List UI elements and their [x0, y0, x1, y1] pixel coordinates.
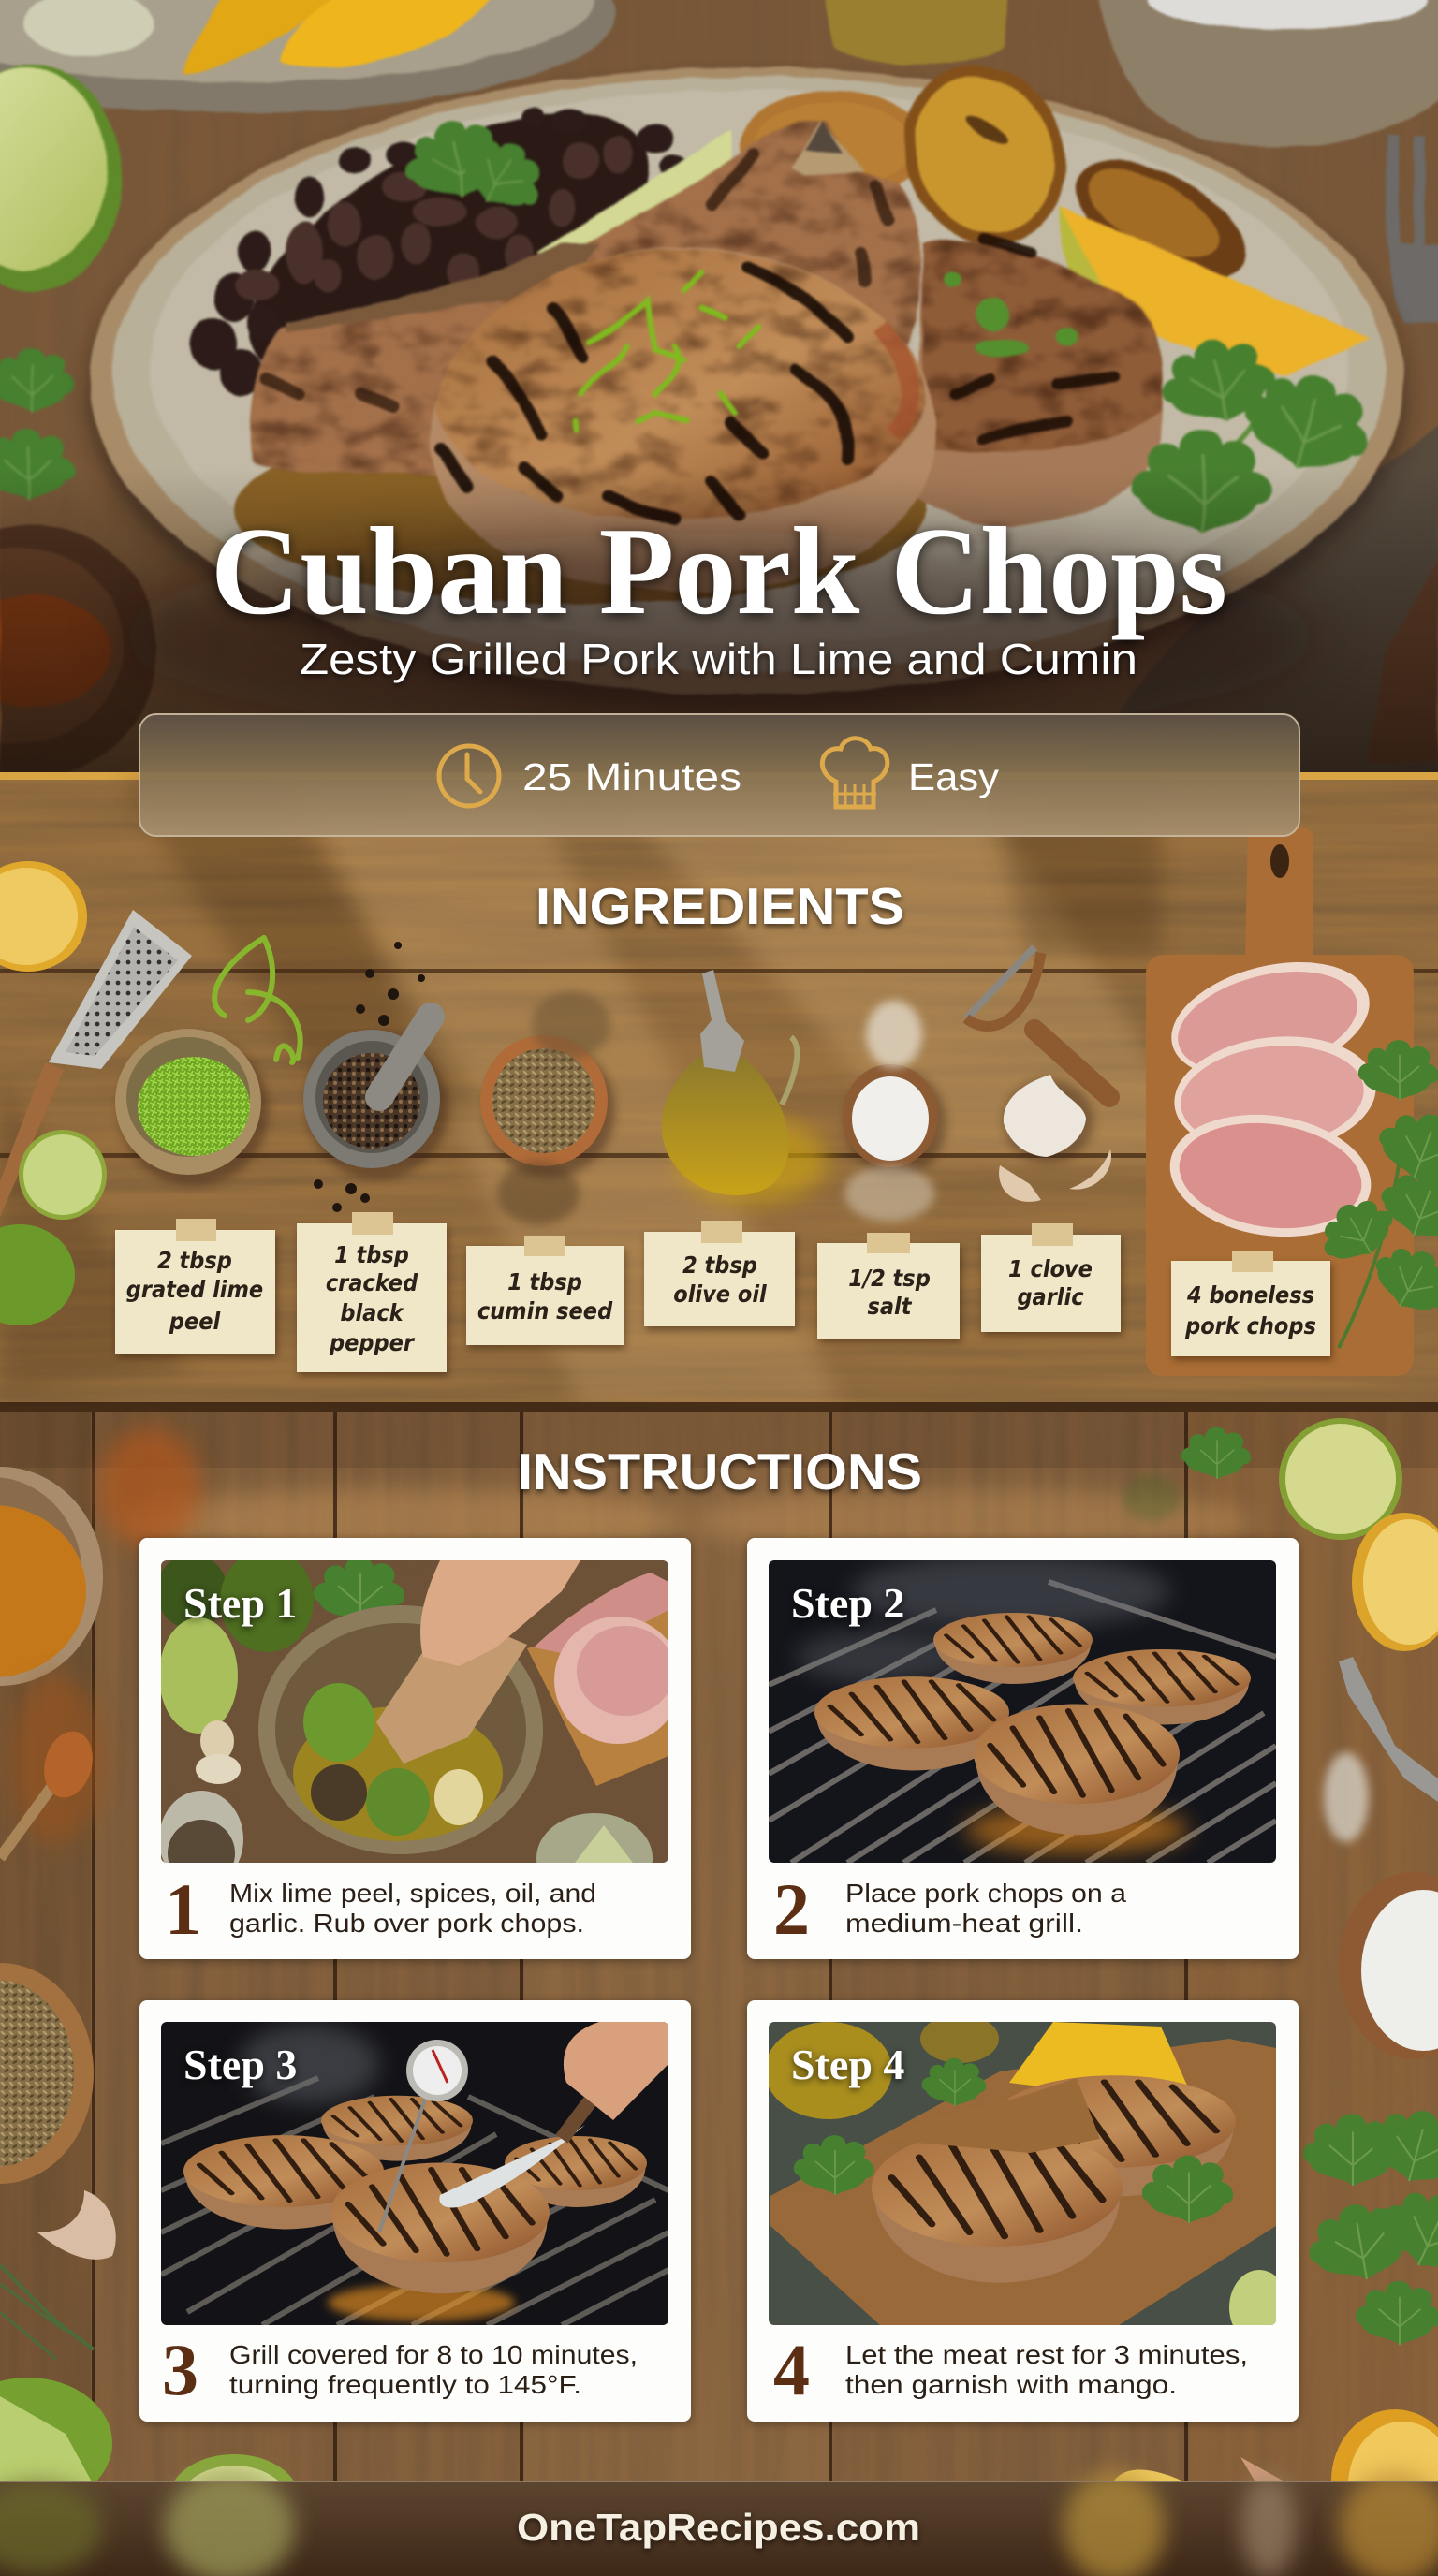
ingredient note: cumin: 1 tbsp	[507, 1268, 582, 1295]
side plate with mango	[0, 0, 616, 112]
pork chop with bone	[251, 120, 920, 524]
sauce pool	[234, 417, 927, 604]
section: ingredients wood background	[0, 780, 1438, 1413]
right pork chop	[889, 239, 1163, 526]
step 4 text	[845, 2340, 1248, 2399]
difficulty label: Easy	[908, 755, 1000, 798]
ingredient note: salt: 1/2 tsp	[848, 1265, 931, 1292]
cilantro sprigs	[0, 348, 75, 501]
parsley	[1310, 1040, 1438, 1348]
black beans	[189, 58, 690, 438]
oil glass	[822, 0, 1009, 65]
footer band	[0, 2471, 1438, 2576]
ingredient note: pork chops	[1171, 1251, 1330, 1356]
ingredient note: lime peel: grated lime	[126, 1276, 263, 1303]
cutting board with pork	[1146, 826, 1414, 1376]
cilantro on plate	[1131, 329, 1383, 534]
spice bowl	[0, 524, 157, 777]
ingredient note: olive oil	[644, 1221, 795, 1326]
step 4 text: Let the meat rest for 3 minutes,	[845, 2340, 1248, 2369]
ingredient note: black pepper: black	[340, 1299, 405, 1326]
mortar of cracked pepper	[303, 1017, 448, 1179]
main pork chop	[429, 247, 936, 592]
section: instructions wood background	[0, 1412, 1438, 2488]
lemon slice	[0, 861, 87, 972]
bowl top right	[1097, 0, 1438, 148]
mango wedge	[1060, 206, 1371, 376]
ingredient note: lime peel: peel	[169, 1308, 220, 1335]
garlic bulb and cloves	[999, 1075, 1111, 1202]
ingredient note: garlic: 1 clove	[1008, 1255, 1093, 1282]
bowl of grated lime peel	[115, 1029, 269, 1186]
step 2 number: 2	[773, 1868, 810, 1950]
card: step 2	[747, 1538, 1299, 1961]
ingredient note: cumin: cumin seed	[477, 1297, 613, 1325]
step 4 text: then garnish with mango.	[845, 2370, 1177, 2399]
lime zest garnish	[576, 271, 758, 431]
step 4 photo: resting with mango	[765, 2014, 1289, 2345]
lime wedge	[537, 129, 732, 267]
olive oil bottle	[662, 970, 829, 1203]
decor: right citrus, fork, salt, herbs	[1114, 1418, 1438, 2552]
step 1 photo: rubbing pork chops	[156, 1549, 682, 1903]
step 2 text	[845, 1879, 1126, 1938]
whole lime	[0, 1224, 75, 1325]
ingredient note: cumin	[466, 1236, 624, 1345]
step 3 text: turning frequently to 145°F.	[229, 2370, 581, 2399]
ingredient note: pork chops: 4 boneless	[1186, 1281, 1314, 1309]
step 4 label: Step 4	[791, 2041, 904, 2088]
ingredient note: garlic	[981, 1223, 1121, 1332]
grater	[0, 910, 192, 1217]
title: Cuban Pork Chops	[211, 502, 1227, 640]
step 2 photo: chops on grill	[769, 1554, 1276, 1863]
cilantro on beans	[399, 113, 555, 222]
ingredient note: black pepper	[297, 1212, 447, 1372]
step 4 number: 4	[773, 2329, 810, 2410]
step 2 text: Place pork chops on a	[845, 1879, 1126, 1908]
step 1 text	[229, 1879, 596, 1938]
ingredient note: salt: salt	[867, 1293, 913, 1320]
pork chop 1	[1159, 944, 1382, 1097]
hero photo: plated pork chops	[0, 0, 1438, 796]
ingredient note: black pepper: cracked	[326, 1269, 418, 1296]
ingredient note: black pepper: 1 tbsp	[334, 1241, 409, 1268]
gold divider	[0, 772, 1438, 780]
lime half	[19, 1130, 107, 1220]
step 3 number: 3	[162, 2329, 198, 2410]
fried plantains	[740, 38, 1265, 303]
scattered pepper	[314, 942, 425, 1212]
card: step 1	[139, 1538, 691, 1961]
cumin in wood bowl	[480, 991, 615, 1225]
card: step 4	[747, 2000, 1299, 2423]
pork chop 3	[1162, 1103, 1379, 1249]
website: OneTapRecipes.com	[517, 2506, 920, 2549]
heading: instructions: INSTRUCTIONS	[518, 1442, 922, 1500]
card: step 3	[139, 2000, 691, 2423]
lime peel curls	[214, 938, 301, 1062]
step 3 text	[229, 2340, 638, 2399]
ingredient note: olive oil: 2 tbsp	[682, 1251, 757, 1279]
ingredient note: lime peel: 2 tbsp	[157, 1247, 232, 1274]
time label: 25 Minutes	[522, 755, 741, 798]
ingredient note: lime peel	[115, 1219, 275, 1354]
step 3 text: Grill covered for 8 to 10 minutes,	[229, 2340, 638, 2369]
ingredient note: garlic: garlic	[1017, 1283, 1084, 1310]
step 2 label: Step 2	[791, 1579, 904, 1627]
ingredient note: black pepper: pepper	[329, 1329, 416, 1356]
tongs and hand	[439, 2022, 668, 2207]
ingredient note: salt	[817, 1233, 960, 1339]
info bar: time and difficulty	[139, 714, 1299, 836]
step 1 number: 1	[165, 1868, 201, 1950]
step 1 text: Mix lime peel, spices, oil, and	[229, 1879, 596, 1908]
pork chop 2	[1168, 1027, 1382, 1164]
step 3 photo: grilling with thermometer	[161, 2022, 668, 2325]
ingredient note: pork chops: pork chops	[1184, 1312, 1316, 1339]
step 1 text: garlic. Rub over pork chops.	[229, 1909, 584, 1938]
lime half	[0, 65, 122, 291]
step 3 label: Step 3	[183, 2041, 297, 2088]
icon: chef hat	[822, 739, 888, 807]
icon: clock	[439, 746, 499, 806]
dark gradient behind title	[0, 468, 1438, 796]
subtitle: Zesty Grilled Pork with Lime and Cumin	[300, 635, 1137, 683]
main plate	[89, 67, 1405, 711]
step 1 label: Step 1	[183, 1579, 297, 1627]
decor: left spice bowls and spoon	[0, 1427, 201, 2359]
step 2 text: medium-heat grill.	[845, 1909, 1083, 1938]
napkin and knife	[1120, 425, 1438, 772]
peeler	[966, 947, 1109, 1097]
heading: ingredients: INGREDIENTS	[536, 877, 904, 935]
salt bowl	[843, 1001, 946, 1222]
decor: limes bottom left	[0, 2378, 300, 2552]
thermometer	[379, 2040, 468, 2232]
ingredient note: olive oil: olive oil	[673, 1281, 767, 1308]
fork	[1387, 136, 1438, 323]
